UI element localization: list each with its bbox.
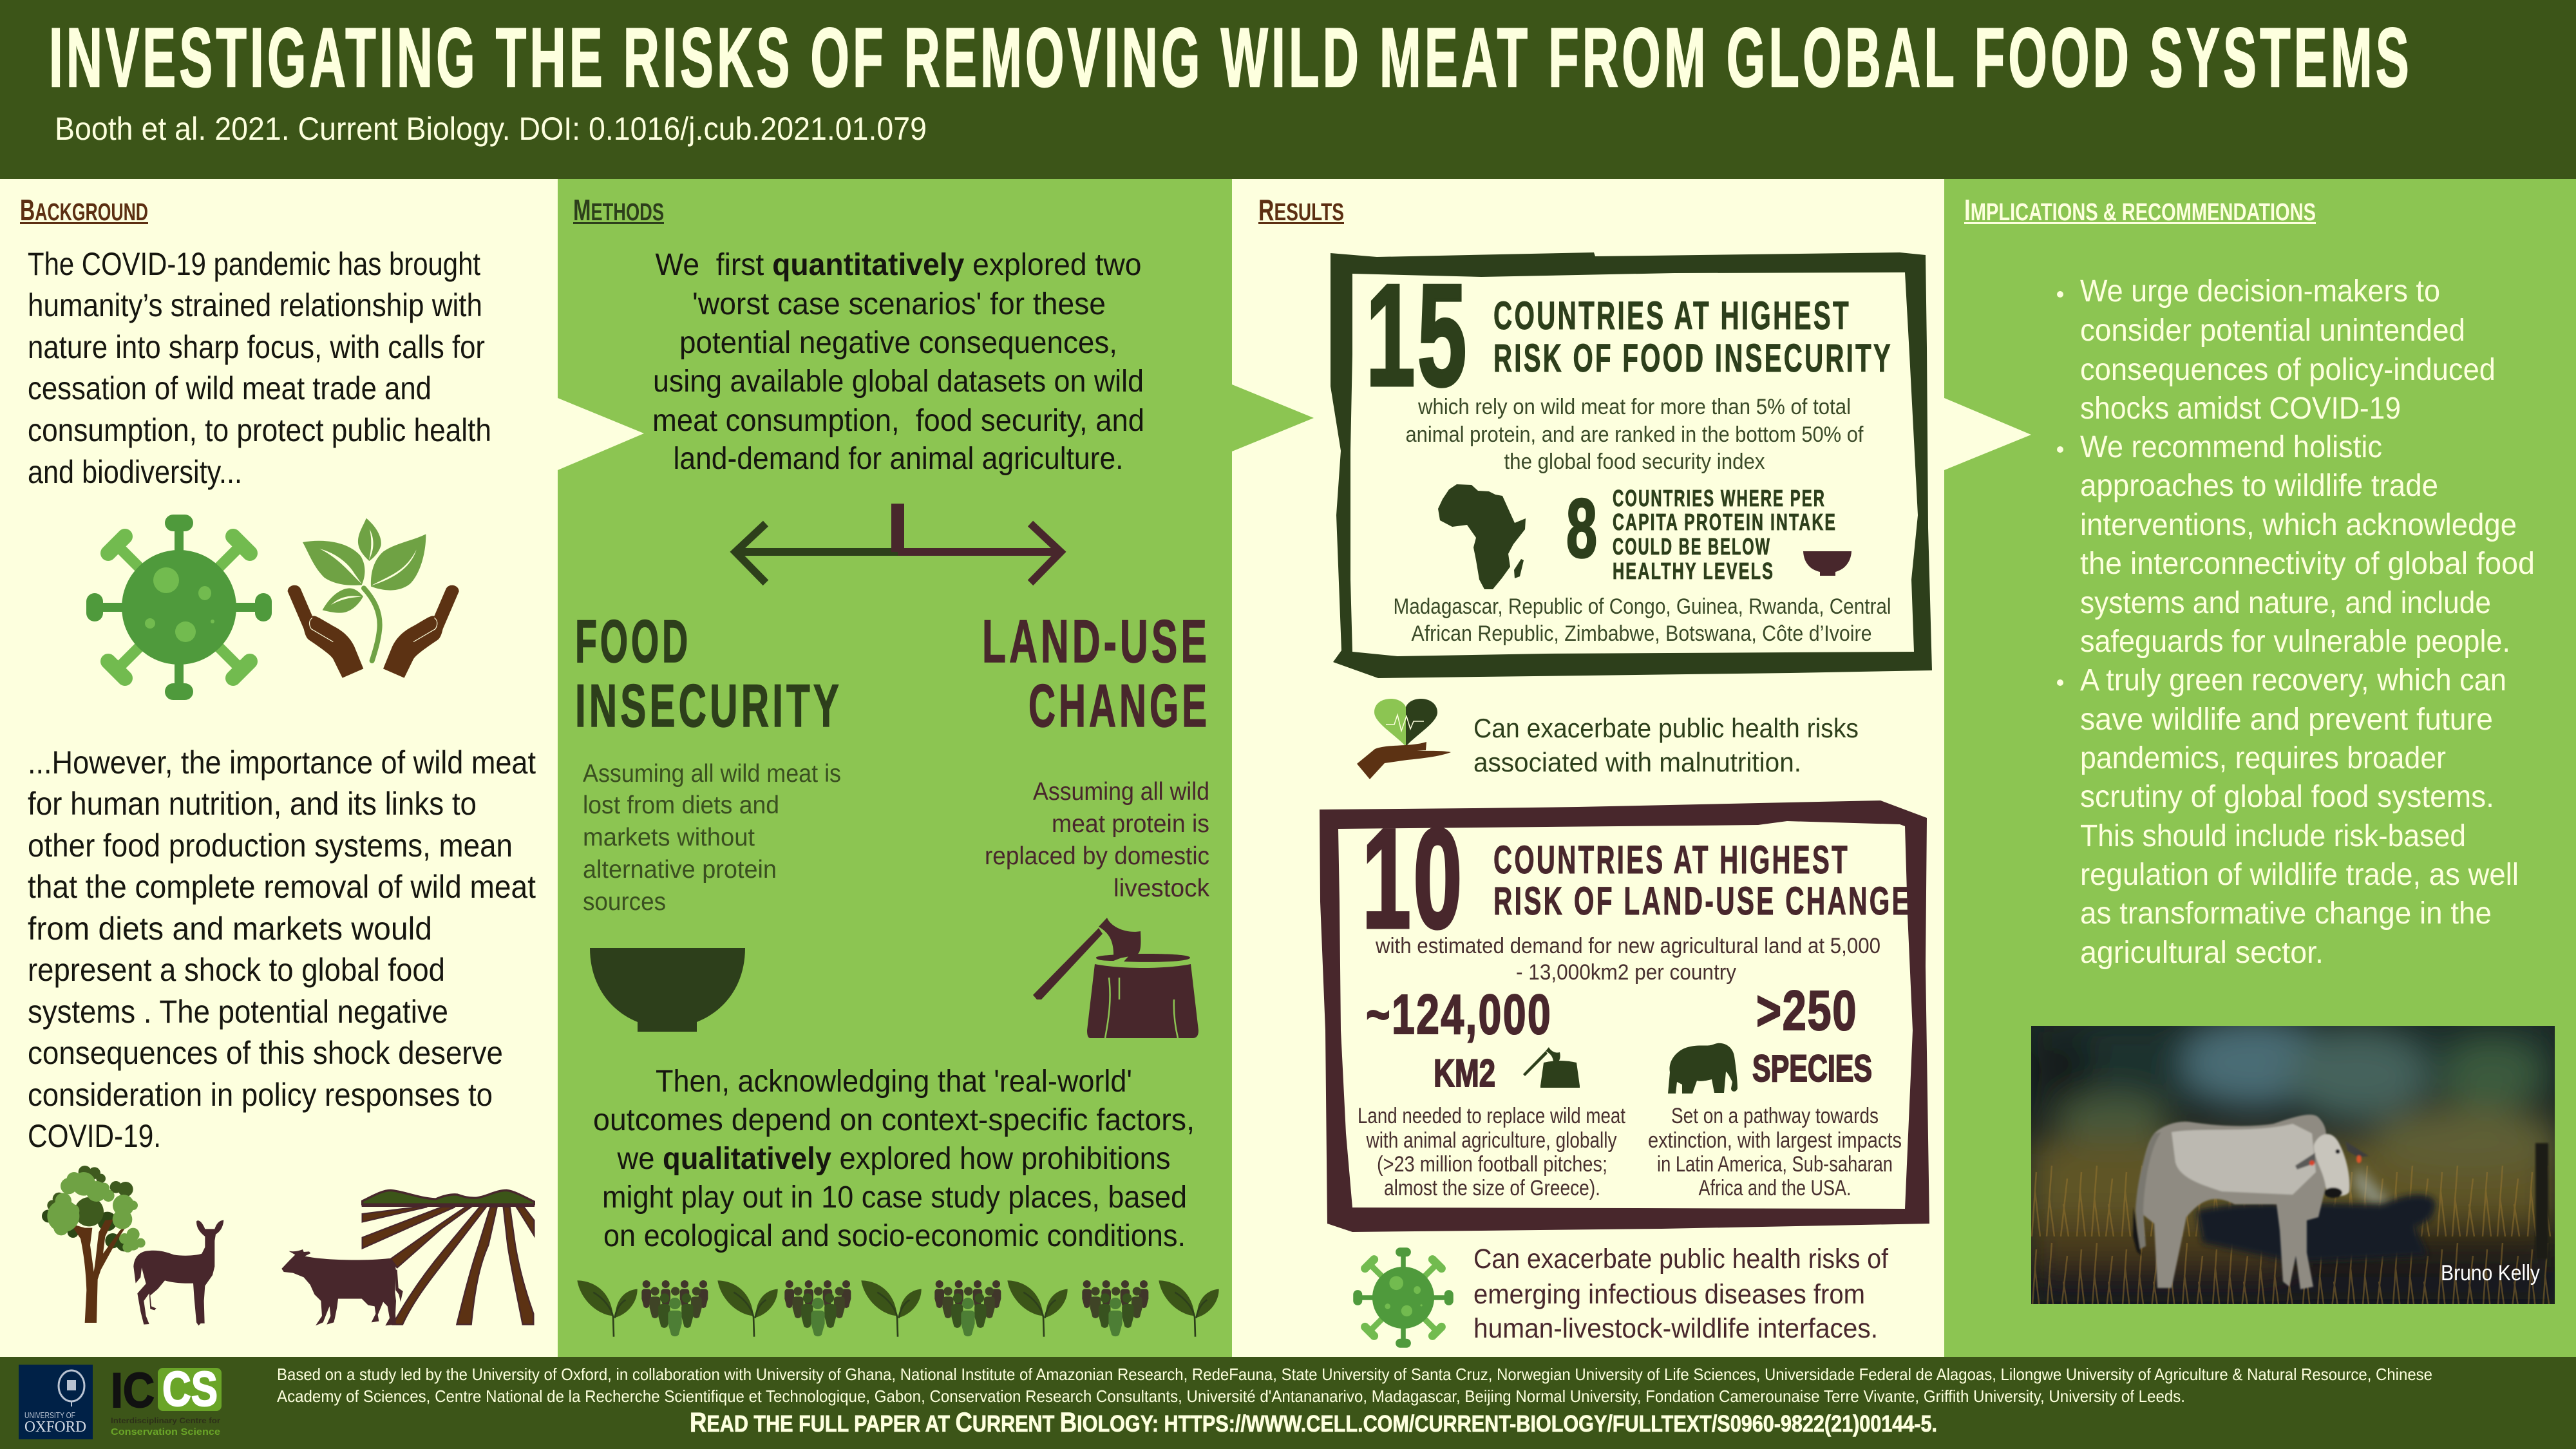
text: background however (28, 744, 536, 1154)
heading: food insecurity: FOOD (575, 607, 691, 675)
photo: cow in burnt forest (2029, 1018, 2563, 1311)
icon: heart in hand (1357, 699, 1451, 779)
text: countries protein (1613, 485, 1837, 584)
text: country list: African Republic, Zimbabwe, Botswana, Côte d’Ivoire (1412, 621, 1871, 646)
text: species extinction (1648, 1104, 1902, 1200)
icon: small bowl (1803, 551, 1852, 576)
text: land-use scenario: replaced by domestic (985, 842, 1209, 870)
heading: countries land-use: COUNTRIES AT HIGHEST (1493, 838, 1850, 882)
stat: 124,000 km2 (1366, 983, 1552, 1095)
icon: plant in hands (288, 518, 459, 678)
text: methods qualitative: we qualitatively explored how prohibitions (617, 1142, 1171, 1176)
text: countries protein: HEALTHY LEVELS (1613, 558, 1774, 584)
icon: field and cow (281, 1190, 535, 1325)
text: methods quantitative (652, 248, 1144, 476)
text: methods quantitative: using available global datasets on wild (653, 365, 1144, 399)
stat: 250 species (1752, 980, 1872, 1090)
text: food insecurity scenario: Assuming all wild meat is (583, 760, 841, 788)
heading: land-use change (982, 607, 1210, 739)
text: background intro (28, 246, 491, 490)
heading: countries food insecurity: RISK OF FOOD INSECURITY (1493, 336, 1893, 380)
text: malnutrition risk: associated with malnutrition. (1473, 747, 1801, 777)
text: food insecurity scenario: alternative protein (583, 856, 777, 884)
heading: food insecurity (575, 607, 842, 739)
text: read full paper link: READ THE FULL PAPER AT CURRENT BIOLOGY: HTTPS://WWW.CELL.COM/CURRENT-BIOLOGY/FULLTEXT/S0960-9822(21)00144-5. (690, 1407, 1937, 1438)
cow (2133, 1115, 2369, 1289)
icon: Africa (1438, 484, 1526, 589)
text: land-use description: - 13,000km2 per country (1516, 960, 1736, 985)
text: implications bullets: approaches to wildlife trade (2080, 469, 2438, 503)
text: background intro: The COVID-19 pandemic has brought (28, 246, 480, 282)
text: background intro: humanity’s strained relationship with (28, 287, 482, 323)
text: land-use description: with estimated demand for new agricultural land at 5,000 (1375, 934, 1880, 958)
heading: methods: METHODS (573, 193, 664, 227)
text: methods quantitative: potential negative consequences, (679, 326, 1117, 360)
text: implications bullets: We recommend holistic (2080, 430, 2382, 464)
panel: methods (558, 179, 1232, 1357)
icon: elephant (1668, 1043, 1738, 1094)
text: land-use scenario: meat protein is (1052, 810, 1209, 838)
text: photo credit: Bruno Kelly (2441, 1261, 2540, 1285)
text: methods quantitative: meat consumption, food security, and (652, 404, 1144, 438)
text: land needed: Land needed to replace wild meat (1358, 1104, 1625, 1128)
stat: 250 species: SPECIES (1752, 1048, 1872, 1090)
icon: bowl (590, 948, 745, 1032)
text: implications bullets: agricultural sector. (2080, 936, 2324, 970)
text: background however: consideration in policy responses to (28, 1077, 493, 1113)
text: land-use description (1375, 934, 1880, 985)
text: implications bullets (2057, 274, 2535, 970)
text: food insecurity description: animal protein, and are ranked in the bottom 50% of (1405, 422, 1864, 447)
stat: 10: 10 (1362, 799, 1464, 958)
text: implications bullets: This should include risk-based (2080, 819, 2466, 853)
text: species extinction: Set on a pathway towards (1671, 1104, 1879, 1128)
text: implications bullets: save wildlife and prevent future (2080, 703, 2493, 737)
text: methods quantitative: We first quantitatively explored two (656, 248, 1141, 282)
text: species extinction: extinction, with largest impacts (1648, 1128, 1902, 1153)
text: background intro: cessation of wild meat trade and (28, 370, 431, 406)
text: methods qualitative: on ecological and socio-economic conditions. (603, 1219, 1186, 1253)
text: background however: other food production systems, mean (28, 828, 513, 864)
arrow: two-way split (735, 504, 1061, 583)
text: land needed: with animal agriculture, globally (1366, 1128, 1616, 1153)
icon: tree (42, 1166, 146, 1323)
subtitle citation: Booth et al. 2021. Current Biology. DOI: 0.1016/j.cub.2021.01.079 (55, 111, 927, 147)
heading: results: RESULTS (1258, 193, 1344, 227)
text: countries protein: COUNTRIES WHERE PER (1613, 485, 1826, 511)
text: implications bullets: We urge decision-makers to (2080, 274, 2440, 308)
text: implications bullets: consequences of policy-induced (2080, 353, 2496, 387)
text: land-use scenario: Assuming all wild (1033, 778, 1209, 806)
text: food insecurity description: the global food security index (1504, 450, 1765, 474)
heading: land-use change: CHANGE (1028, 672, 1210, 739)
stat: 124,000 km2: ~124,000 (1366, 983, 1552, 1046)
text: methods qualitative: outcomes depend on context-specific factors, (593, 1103, 1195, 1137)
text: implications bullets: systems and nature, and include (2080, 586, 2491, 620)
text: species extinction: in Latin America, Sub-saharan (1657, 1152, 1893, 1177)
arrow: results to implications (1944, 398, 2031, 470)
stat: 250 species: >250 (1756, 980, 1857, 1042)
text: methods qualitative (593, 1065, 1195, 1253)
text: affiliations: Academy of Sciences, Centre National de la Recherche Scientifique et Technologique, Gabon, Conservation Research Consultants, Université d'Antananarivo, Madagascar, Beijing Normal University, Fondation Camerounaise Terre Vivante, Griffith University, University of Leeds. (277, 1387, 2185, 1406)
stat: 124,000 km2: KM2 (1434, 1052, 1495, 1095)
heading: background: BACKGROUND (20, 193, 148, 227)
logo: ICCS: Conservation Science (111, 1426, 220, 1437)
heading: land-use change: LAND-USE (982, 607, 1210, 675)
text: infectious disease risk (1473, 1244, 1889, 1344)
panel: land-use results frame (1320, 800, 1929, 1232)
icon: small virus (1358, 1252, 1449, 1343)
icon row: leaves and people (577, 1280, 1219, 1337)
text: infectious disease risk: emerging infectious diseases from (1473, 1279, 1865, 1310)
heading: food insecurity: INSECURITY (575, 672, 842, 739)
logo: ICCS: IC (111, 1363, 155, 1418)
text: background however: systems . The potential negative (28, 994, 448, 1030)
text: land needed: (>23 million football pitches; (1377, 1152, 1607, 1177)
text: land needed: almost the size of Greece). (1384, 1176, 1600, 1200)
text: food insecurity scenario: markets without (583, 824, 755, 851)
text: implications bullets: interventions, which acknowledge (2080, 508, 2517, 542)
logo: Oxford (19, 1365, 93, 1439)
text: affiliations: Based on a study led by the University of Oxford, in collaboration with University of Ghana, National Institute of Amazonian Research, RedeFauna, State University of Santa Cruz, Norwegian University of Life Sciences, Universidade Federal de Alagoas, Lilongwe University of Agriculture & Natural Resource, Chinese (277, 1365, 2432, 1384)
text: land needed (1358, 1104, 1625, 1200)
text: background however: consequences of this shock deserve (28, 1035, 503, 1071)
heading: countries food insecurity: COUNTRIES AT HIGHEST (1493, 294, 1851, 337)
text: implications bullets: the interconnectivity of global food (2080, 547, 2535, 581)
icon: virus (95, 523, 263, 692)
text: background however: from diets and markets would (28, 911, 432, 947)
logo: ICCS: CS (162, 1362, 218, 1417)
logo: ICCS: Interdisciplinary Centre for (111, 1416, 220, 1425)
panel: results (1232, 179, 1944, 1357)
text: implications bullets: A truly green recovery, which can (2080, 663, 2506, 697)
heading: countries food insecurity (1493, 294, 1893, 380)
text: food insecurity scenario (583, 760, 841, 916)
text: food insecurity description (1405, 395, 1864, 474)
icon: small axe and stump (1523, 1047, 1580, 1088)
text: implications bullets: shocks amidst COVID-19 (2080, 392, 2401, 426)
logo: ICCS (111, 1362, 222, 1437)
text: background however: that the complete removal of wild meat (28, 869, 536, 905)
text: country list: Madagascar, Republic of Congo, Guinea, Rwanda, Central (1394, 594, 1891, 619)
heading: countries land-use (1493, 838, 1911, 923)
panel: background (0, 179, 558, 1357)
text: implications bullets: scrutiny of global food systems. (2080, 780, 2494, 814)
text: countries protein: COULD BE BELOW (1613, 533, 1771, 560)
stat: 15: 15 (1366, 254, 1469, 416)
heading: countries land-use: RISK OF LAND-USE CHANGE (1493, 879, 1911, 923)
text: methods quantitative: land-demand for animal agriculture. (674, 442, 1123, 476)
text: background however: COVID-19. (28, 1118, 161, 1154)
text: implications bullets: regulation of wildlife trade, as well (2080, 858, 2519, 892)
text: malnutrition risk: Can exacerbate public health risks (1473, 713, 1859, 743)
panel: implications (1944, 179, 2576, 1357)
arrow: methods to results (1232, 384, 1314, 451)
header band (0, 0, 2576, 179)
logo: Oxford: OXFORD (24, 1419, 86, 1435)
logo: Oxford: UNIVERSITY OF (24, 1410, 75, 1420)
text: background intro: nature into sharp focus, with calls for (28, 329, 485, 365)
footer band (0, 1357, 2576, 1449)
text: implications bullets: consider potential unintended (2080, 314, 2465, 348)
icon: axe and stump (1033, 918, 1198, 1038)
text: affiliations (277, 1365, 2432, 1406)
text: implications bullets: as transformative change in the (2080, 896, 2492, 931)
stat: 8: 8 (1566, 481, 1597, 575)
text: species extinction: Africa and the USA. (1699, 1176, 1851, 1200)
text: background however: represent a shock to global food (28, 952, 445, 988)
panel: food insecurity results frame (1331, 252, 1932, 678)
heading: implications: IMPLICATIONS & RECOMMENDATIONS (1964, 193, 2316, 227)
arrow: background to methods (558, 398, 644, 470)
text: food insecurity description: which rely on wild meat for more than 5% of total (1417, 395, 1851, 419)
text: background intro: and biodiversity... (28, 454, 242, 490)
text: country list (1394, 594, 1891, 646)
text: land-use scenario: livestock (1113, 875, 1209, 902)
text: land-use scenario (985, 778, 1209, 902)
text: background however: for human nutrition, and its links to (28, 786, 477, 822)
text: background intro: consumption, to protect public health (28, 412, 491, 448)
text: infectious disease risk: Can exacerbate public health risks of (1473, 1244, 1889, 1274)
text: food insecurity scenario: lost from diets and (583, 791, 779, 819)
text: malnutrition risk (1473, 713, 1859, 777)
text: implications bullets: safeguards for vulnerable people. (2080, 625, 2510, 659)
text: background however: ...However, the importance of wild meat (28, 744, 536, 781)
icon: deer (133, 1220, 223, 1325)
text: methods qualitative: might play out in 10 case study places, based (602, 1180, 1187, 1215)
text: methods qualitative: Then, acknowledging that 'real-world' (656, 1065, 1132, 1099)
text: methods quantitative: 'worst case scenarios' for these (692, 287, 1106, 321)
text: food insecurity scenario: sources (583, 888, 666, 916)
text: implications bullets: pandemics, requires broader (2080, 741, 2446, 775)
text: infectious disease risk: human-livestock-wildlife interfaces. (1473, 1313, 1878, 1344)
text: countries protein: CAPITA PROTEIN INTAKE (1613, 509, 1837, 535)
